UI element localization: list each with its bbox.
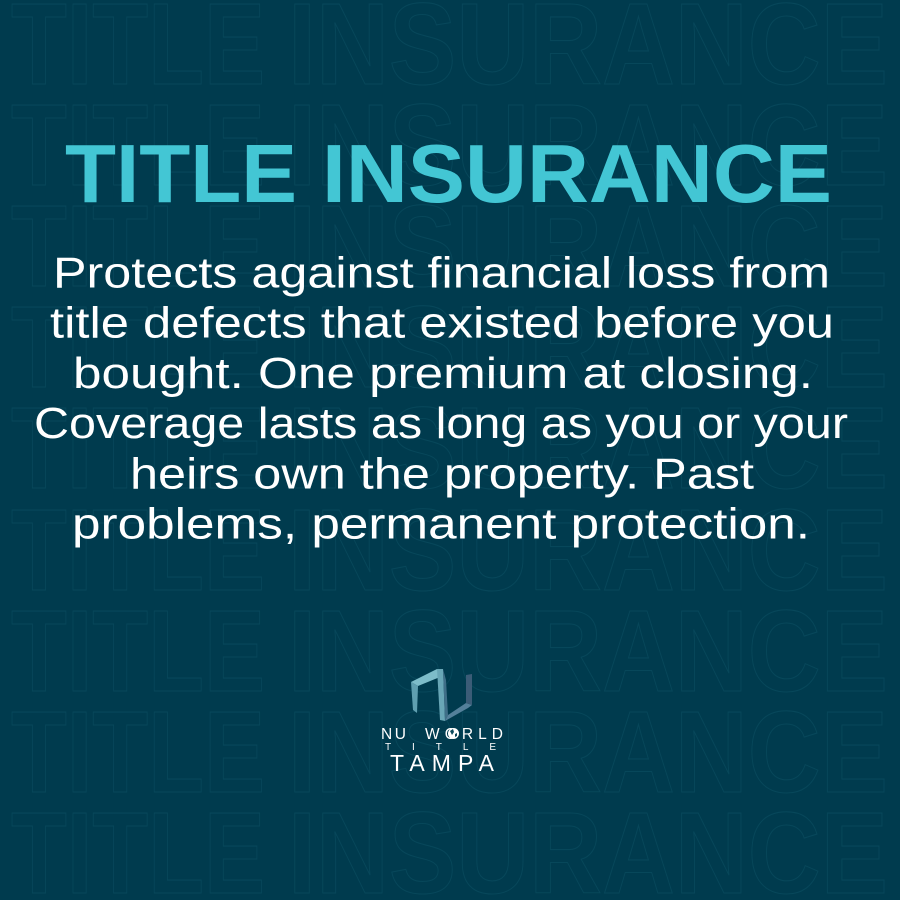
logo location: TAMPA (390, 750, 495, 776)
background pattern: outlined repeated words: TITLE (11, 383, 265, 513)
body text: bought. One premium at closing. (73, 350, 813, 398)
logo wordmark: WORLD (425, 726, 503, 743)
background pattern: outlined repeated words: TITLE (11, 80, 265, 210)
body text: Protects against financial loss from (53, 250, 830, 298)
icon: NU monogram (411, 669, 472, 721)
logo: Nu World Title Tampa (381, 669, 503, 776)
logo wordmark (381, 726, 503, 743)
background pattern: outlined repeated words: TITLE (11, 181, 265, 311)
body text: problems, permanent protection. (72, 500, 810, 548)
background pattern: outlined repeated words: TITLE (11, 282, 265, 412)
body text (34, 250, 848, 548)
background pattern: outlined repeated words: TITLE (11, 586, 265, 716)
title (65, 127, 832, 220)
icon: globe in wordmark (448, 728, 459, 739)
title: INSURANCE (322, 127, 832, 220)
body text: heirs own the property. Past (130, 450, 754, 498)
body text: title defects that existed before you (50, 300, 834, 348)
body text: Coverage lasts as long as you or your (34, 400, 848, 448)
logo subword: TITLE (385, 742, 496, 753)
background pattern: outlined repeated words: TITLE (11, 687, 265, 817)
title: TITLE (65, 127, 297, 220)
logo wordmark: NU (381, 726, 406, 743)
background pattern: outlined repeated words: TITLE (11, 485, 265, 615)
